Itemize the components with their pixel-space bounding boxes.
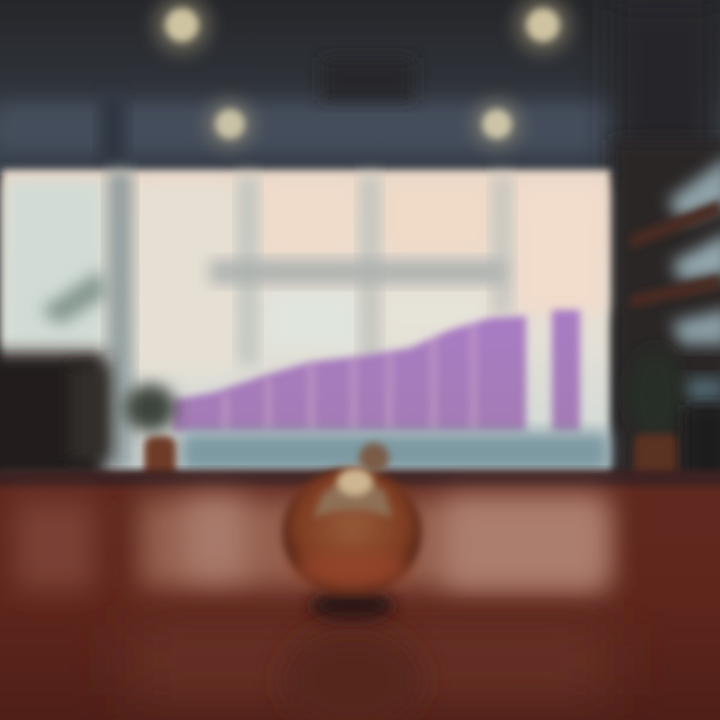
ball shadow and reflection xyxy=(282,590,422,720)
window xyxy=(2,170,610,475)
ceiling xyxy=(0,0,720,175)
bar chart on window xyxy=(172,310,580,432)
ceiling vent xyxy=(322,58,414,100)
right plant and pot xyxy=(629,349,720,490)
table xyxy=(0,470,720,720)
left plant and pot xyxy=(124,384,176,486)
skyline band below bars xyxy=(180,432,610,472)
ceiling lights xyxy=(152,0,573,150)
figurine: round ball xyxy=(282,443,422,596)
right bookshelf xyxy=(612,140,720,490)
left dark furniture xyxy=(0,352,110,482)
window mullions xyxy=(108,170,132,470)
